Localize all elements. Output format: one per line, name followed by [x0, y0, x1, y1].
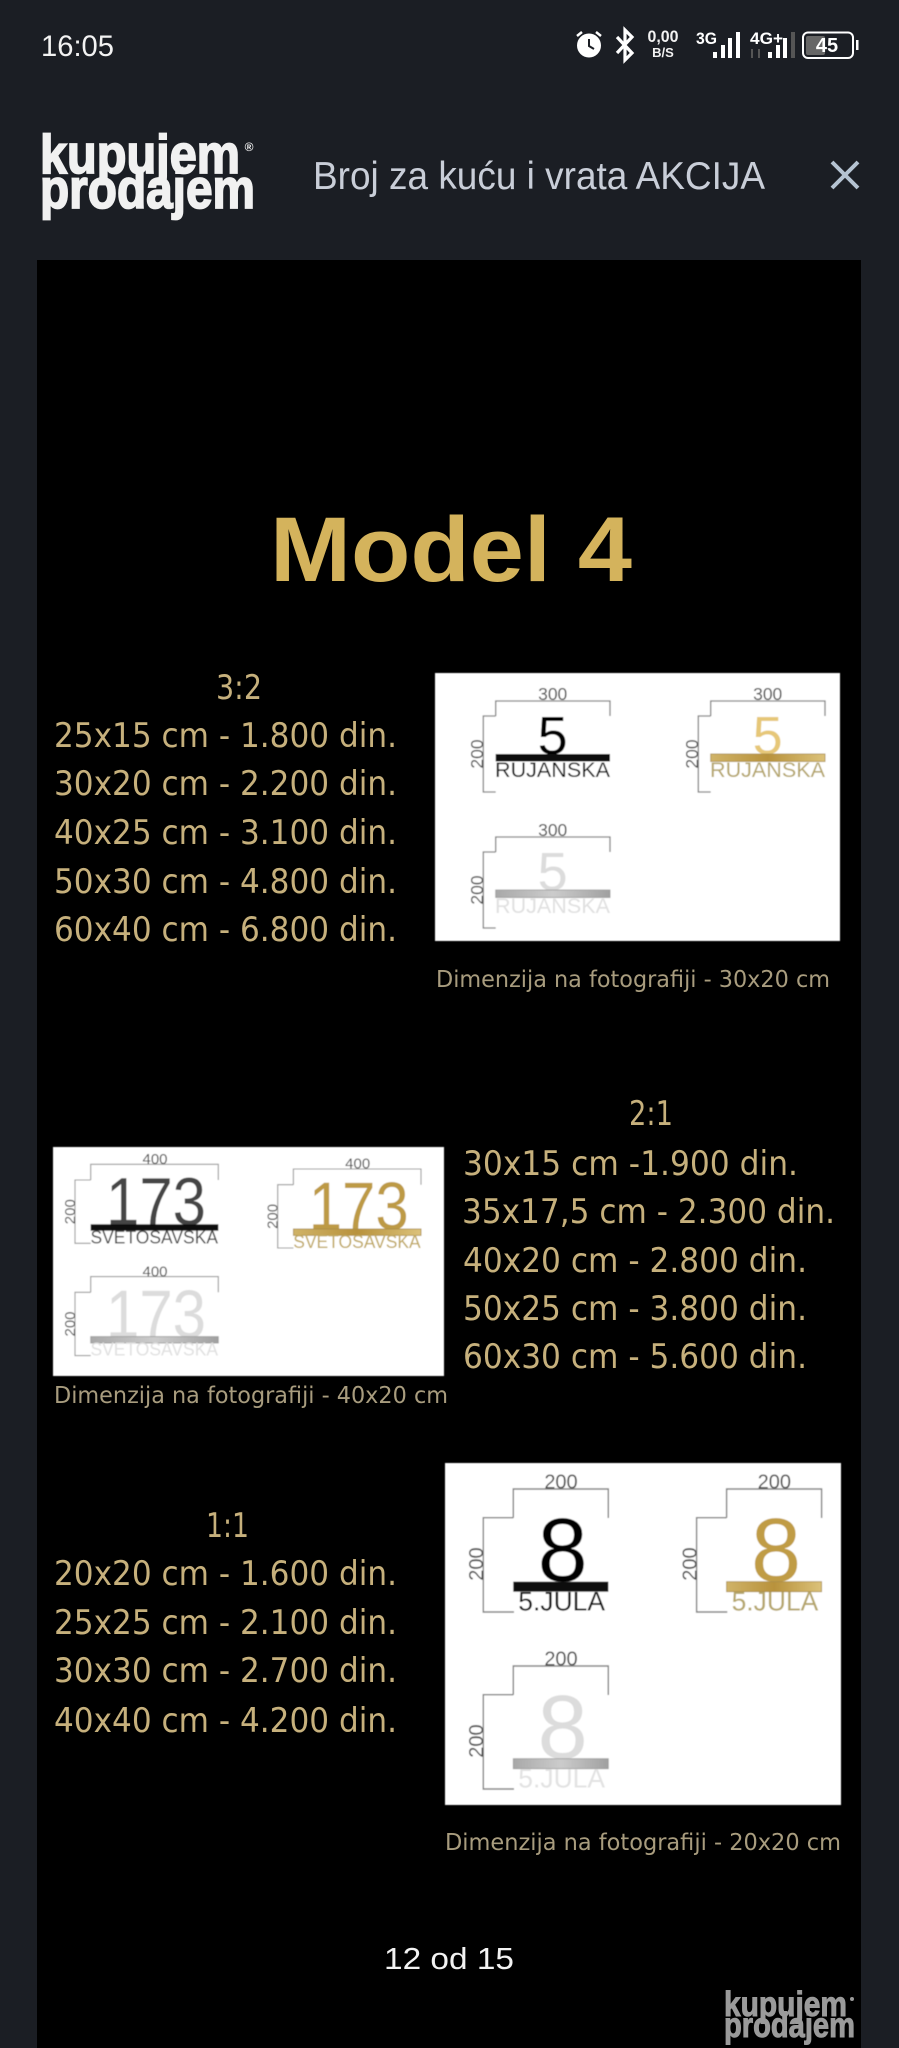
panel: ratio 3:2 prices: 60x40 cm - 6.800 din.: [54, 910, 397, 950]
panel: ratio 2:1 prices: 35x17,5 cm - 2.300 din.: [462, 1192, 835, 1232]
diagram: black sign 173: 200: [62, 1199, 79, 1224]
panel: ratio 1:1 prices: 40x40 cm - 4.200 din.: [54, 1701, 397, 1741]
diagram: black sign 8: 200: [544, 1472, 578, 1494]
panel: ratio 1:1 prices: 1:1: [206, 1506, 249, 1546]
diagram: gold sign 173: [265, 1156, 421, 1252]
network speed: 0,00: [648, 27, 678, 46]
diagram: gold sign 5: [682, 684, 825, 792]
diagram: black sign 8: [466, 1472, 608, 1617]
diagram: silver sign 5: 300: [538, 820, 568, 840]
diagram: gold sign 173: 200: [265, 1204, 282, 1229]
watermark logo: [724, 1985, 855, 2045]
diagram: black sign 8: 5.JULA: [518, 1587, 605, 1617]
panel: ratio 3:2 prices: 3:2: [216, 668, 262, 708]
heading: Model 4: [270, 499, 632, 601]
diagram: silver sign 173: SVETOSAVSKA: [90, 1340, 218, 1360]
icon: close: [832, 162, 858, 188]
signal 4G+: 4G+: [750, 29, 783, 48]
panel: ratio 3:2 prices: 25x15 cm - 1.800 din.: [54, 716, 397, 756]
diagram: black sign 5: 200: [467, 739, 487, 769]
header bar: [40, 123, 858, 220]
panel: ratio 2:1 prices: [462, 1094, 835, 1377]
diagram: gold sign 173: 173: [309, 1169, 409, 1245]
watermark logo: kupujem: [724, 1985, 847, 2024]
panel: ratio 2:1 prices: 40x20 cm - 2.800 din.: [463, 1241, 807, 1281]
panel: ratio 2:1 prices: 60x30 cm - 5.600 din.: [463, 1337, 807, 1377]
diagram: gold sign 5: 5: [753, 706, 783, 766]
diagram: silver sign 8: 8: [538, 1678, 588, 1778]
image: 1:1 product dimensions: [445, 1463, 841, 1805]
diagram: black sign 173: SVETOSAVSKA: [90, 1227, 218, 1247]
clock: 16:05: [41, 30, 114, 63]
diagram: silver sign 5: 5: [538, 842, 568, 902]
diagram: gold sign 8: 200: [679, 1547, 701, 1581]
icon: battery: 45: [816, 35, 838, 57]
panel: ratio 1:1 prices: 20x20 cm - 1.600 din.: [54, 1554, 397, 1594]
panel: ratio 2:1 prices: 50x25 cm - 3.800 din.: [463, 1289, 807, 1329]
panel: ratio 2:1 prices: 2:1: [629, 1094, 673, 1134]
diagram: black sign 5: RUJANSKA: [495, 759, 610, 782]
image: 2:1 product dimensions: [53, 1147, 444, 1376]
panel: ratio 1:1 prices: 30x30 cm - 2.700 din.: [54, 1651, 397, 1691]
logo: kupujem: [40, 123, 240, 185]
signal 4G+: [750, 29, 795, 58]
diagram: black sign 173: [62, 1151, 218, 1247]
icon: alarm: [577, 32, 601, 58]
diagram: gold sign 5: RUJANSKA: [710, 759, 825, 782]
logo: [40, 123, 255, 220]
page counter: 12 od 15: [384, 1941, 514, 1976]
diagram: black sign 5: 5: [538, 706, 568, 766]
diagram: gold sign 8: [679, 1472, 822, 1617]
image: 3:2 product dimensions: [435, 673, 840, 941]
diagram: gold sign 8: 8: [751, 1501, 801, 1601]
diagram: black sign 173: 173: [106, 1164, 206, 1240]
diagram: black sign 5: [467, 684, 610, 792]
panel: ratio 1:1 prices: [54, 1506, 397, 1741]
diagram: silver sign 8: 200: [544, 1648, 578, 1670]
caption 2:1: Dimenzija na fotografiji - 40x20 cm: [54, 1381, 448, 1409]
diagram: silver sign 8: 5.JULA: [518, 1764, 605, 1794]
diagram: gold sign 173: SVETOSAVSKA: [293, 1232, 421, 1252]
diagram: black sign 173: 400: [142, 1151, 168, 1168]
diagram: silver sign 8: [466, 1648, 608, 1794]
diagram: gold sign 8: 5.JULA: [732, 1587, 818, 1617]
diagram: gold sign 5: 300: [753, 684, 783, 704]
diagram: gold sign 173: 400: [345, 1156, 370, 1173]
diagram: silver sign 5: [467, 820, 610, 928]
panel: ratio 2:1 prices: 30x15 cm -1.900 din.: [463, 1144, 798, 1184]
panel: ratio 3:2 prices: 40x25 cm - 3.100 din.: [54, 813, 397, 853]
diagram: silver sign 5: 200: [467, 875, 487, 905]
logo: ®: [245, 140, 254, 154]
diagram: silver sign 5: RUJANSKA: [495, 895, 610, 918]
diagram: silver sign 8: 200: [466, 1724, 488, 1758]
diagram: silver sign 173: 173: [106, 1276, 206, 1352]
signal 3G: [696, 29, 740, 58]
signal 3G: 3G: [696, 29, 717, 48]
watermark logo: prodajem: [724, 2006, 855, 2045]
icon: battery: [803, 32, 858, 58]
diagram: silver sign 173: [62, 1263, 218, 1360]
panel: ratio 3:2 prices: [54, 668, 397, 950]
caption 3:2: Dimenzija na fotografiji - 30x20 cm: [436, 965, 830, 993]
diagram: gold sign 8: 200: [758, 1472, 791, 1494]
caption 1:1: Dimenzija na fotografiji - 20x20 cm: [445, 1828, 841, 1856]
diagram: black sign 8: 8: [538, 1501, 588, 1601]
icon: bluetooth: [617, 30, 632, 60]
diagram: silver sign 173: 400: [142, 1263, 168, 1280]
diagram: black sign 8: 200: [466, 1547, 488, 1581]
status bar: [41, 27, 858, 63]
diagram: silver sign 173: 200: [62, 1311, 79, 1337]
diagram: black sign 5: 300: [538, 684, 568, 704]
panel: ratio 1:1 prices: 25x25 cm - 2.100 din.: [54, 1603, 397, 1643]
panel: ratio 3:2 prices: 30x20 cm - 2.200 din.: [54, 764, 397, 804]
diagram: gold sign 5: 200: [682, 739, 702, 769]
network speed: [648, 27, 678, 60]
header title: Broj za kuću i vrata AKCIJA: [313, 155, 765, 198]
logo: prodajem: [40, 157, 255, 220]
panel: ratio 3:2 prices: 50x30 cm - 4.800 din.: [54, 862, 397, 902]
network speed: B/S: [652, 45, 674, 60]
